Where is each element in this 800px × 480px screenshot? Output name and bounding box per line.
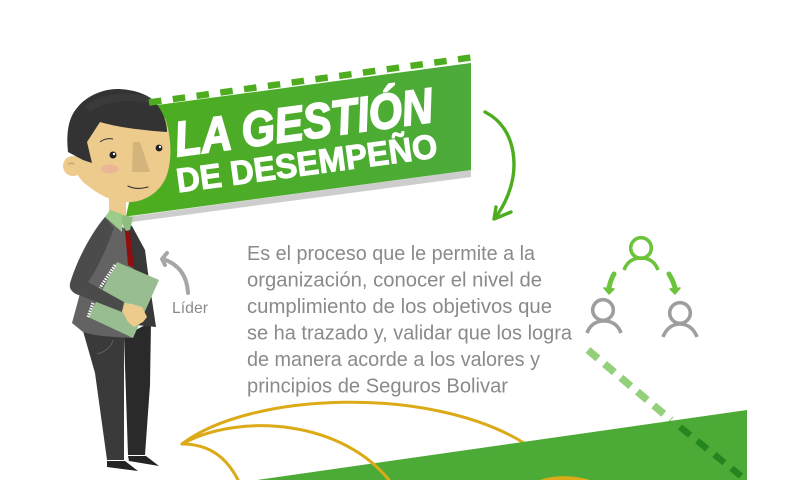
gold blob (540, 476, 590, 480)
description text: se ha trazado y, validar que los logra (247, 322, 573, 344)
neck (109, 190, 126, 222)
hand (122, 303, 147, 327)
arrow: title to description (485, 112, 514, 219)
arrow: to right person (669, 274, 680, 294)
lower green panel (257, 410, 747, 480)
face (74, 118, 170, 202)
ear (63, 156, 83, 176)
icon: green person (624, 238, 658, 270)
title (171, 79, 440, 200)
description text: organización, conocer el nivel de (247, 268, 542, 292)
arm (70, 217, 124, 312)
shoes (107, 456, 159, 471)
cheek (101, 164, 119, 174)
description text: principios de Seguros Bolivar (247, 374, 508, 398)
mouth (128, 186, 148, 188)
label: Líder: Líder (172, 300, 209, 317)
nose (132, 142, 150, 172)
character: leader (63, 89, 170, 471)
banner: title ribbon (126, 63, 471, 222)
description text (247, 242, 573, 398)
gold curve: outer (182, 402, 524, 444)
eyes (100, 139, 162, 158)
title: LA GESTIÓN (171, 79, 438, 167)
description text: cumplimiento de los objetivos que (247, 295, 552, 318)
gold curves: inner (182, 426, 392, 480)
collar (105, 210, 133, 232)
hair (67, 89, 167, 163)
icon: grey person left (587, 300, 621, 333)
arrow: leader label (162, 253, 188, 293)
dashed line: dark segment (680, 427, 741, 476)
icon: grey person right (663, 303, 697, 337)
dashed line: light segment (588, 350, 671, 420)
dashed top edge of banner (149, 58, 471, 102)
trousers (83, 322, 151, 460)
description text: de manera acorde a los valores y (247, 348, 541, 371)
folder (88, 262, 159, 338)
jacket (72, 217, 156, 338)
tie (125, 230, 134, 268)
arrow: to left person (604, 274, 614, 294)
description text: Es el proceso que le permite a la (247, 242, 536, 265)
title: DE DESEMPEÑO (174, 128, 440, 200)
icon: hierarchy of people (587, 238, 697, 337)
